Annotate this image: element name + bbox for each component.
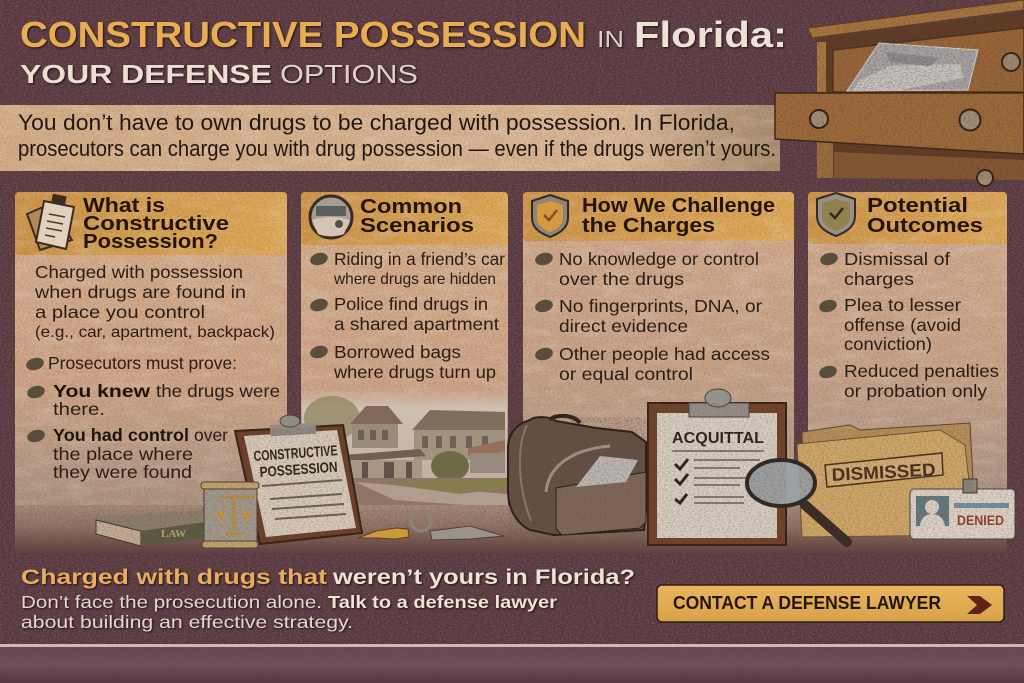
- clipboard: constructive possession: [235, 415, 362, 544]
- scenario list: a shared apartment: [334, 314, 499, 334]
- dismissed stamp: [825, 453, 943, 487]
- id badge: denied: DENIED: [957, 512, 1004, 528]
- challenge list: over the drugs: [559, 269, 684, 289]
- proof list: the drugs were: [156, 381, 280, 401]
- heading: What is: [83, 195, 165, 217]
- call to action heading: [21, 566, 635, 589]
- subtitle: [20, 59, 418, 89]
- dismissed stamp: DISMISSED: [831, 460, 936, 485]
- button: contact a defense lawyer: [657, 585, 1004, 622]
- title: CONSTRUCTIVE POSSESSION: [20, 14, 586, 55]
- heading: Outcomes: [867, 215, 983, 237]
- proof list: [25, 353, 280, 482]
- button: contact a defense lawyer: CONTACT A DEFENSE LAWYER: [673, 593, 941, 613]
- heading: [582, 195, 775, 237]
- call to action text: Talk to a defense lawyer: [328, 592, 557, 612]
- subtitle: YOUR DEFENSE: [20, 59, 272, 89]
- heading: Constructive: [83, 213, 229, 235]
- id badge: denied: [910, 479, 1015, 539]
- panel: what is constructive possession: [15, 192, 287, 547]
- scales of justice tin: [201, 482, 259, 548]
- panel: common scenarios: [301, 192, 508, 547]
- heading: the Charges: [582, 215, 715, 237]
- outcomes list: Reduced penalties: [844, 361, 999, 381]
- icon: shield with check: [817, 193, 855, 236]
- dresser illustration: [775, 0, 1024, 186]
- call to action text: [21, 592, 557, 632]
- plastic bag of drugs: [847, 43, 978, 91]
- proof list: You knew: [53, 381, 150, 401]
- clipboard: acquittal: [648, 389, 786, 545]
- heading: [83, 195, 229, 253]
- footer strip: [0, 644, 1024, 683]
- illustration: neighbourhood houses: [302, 388, 507, 508]
- proof list: they were found: [53, 462, 192, 482]
- outcomes list: conviction): [844, 334, 932, 354]
- arrow: [967, 596, 992, 614]
- call to action text: Don’t face the prosecution alone.: [21, 592, 322, 612]
- scenario list: where drugs turn up: [333, 362, 496, 382]
- title: Florida:: [634, 14, 787, 55]
- definition text: Charged with possession: [35, 262, 243, 282]
- challenge list: Other people had access: [559, 344, 770, 364]
- heading: Common: [360, 196, 462, 218]
- call to action text: about building an effective strategy.: [21, 612, 353, 632]
- outcomes list: charges: [844, 269, 914, 289]
- definition text: a place you control: [35, 302, 205, 322]
- clipboard: constructive possession: POSSESSION: [259, 460, 338, 481]
- panel: potential outcomes: [808, 192, 1007, 547]
- heading: [360, 196, 474, 237]
- drawer knob left: [810, 110, 828, 128]
- heading: [867, 195, 983, 237]
- outcomes list: or probation only: [844, 381, 987, 401]
- heading: How We Challenge: [582, 195, 775, 217]
- heading: Scenarios: [360, 215, 474, 237]
- definition text: when drugs are found in: [34, 282, 246, 302]
- challenge list: No knowledge or control: [559, 249, 759, 269]
- icon: round scenario badge: [310, 196, 352, 238]
- scenario list: Riding in a friend’s car: [334, 249, 505, 269]
- clipboard: constructive possession: CONSTRUCTIVE: [253, 443, 338, 465]
- proof list: the place where: [53, 444, 193, 464]
- challenge list: or equal control: [559, 364, 693, 384]
- definition text: (e.g., car, apartment, backpack): [35, 324, 275, 341]
- challenge list: No fingerprints, DNA, or: [559, 296, 762, 316]
- call to action heading: Charged with drugs that: [21, 566, 327, 589]
- subtitle: OPTIONS: [280, 59, 418, 89]
- backpack: [508, 416, 646, 535]
- outcomes list: Plea to lesser: [844, 295, 961, 315]
- panel: how we challenge the charges: [523, 192, 794, 547]
- book: law: [95, 510, 205, 546]
- scenario list: [309, 249, 505, 382]
- drawer knob right: [960, 110, 980, 130]
- icon: shield with check: [532, 195, 568, 237]
- outcomes list: offense (avoid: [844, 315, 961, 335]
- folder: dismissed: [797, 423, 975, 537]
- heading: Potential: [867, 195, 968, 217]
- definition text: [34, 262, 275, 341]
- open drawer: [775, 93, 1024, 154]
- book: law: LAW: [161, 528, 186, 540]
- magnifying glass: [747, 460, 847, 542]
- challenge list: [534, 249, 770, 384]
- scenario list: Police find drugs in: [334, 294, 488, 314]
- outcomes list: Dismissal of: [844, 249, 950, 269]
- proof list: over: [194, 425, 228, 445]
- keys: [358, 511, 504, 540]
- proof list: Prosecutors must prove:: [48, 353, 237, 373]
- icon: documents: [27, 194, 74, 250]
- proof list: You had control: [53, 425, 189, 445]
- challenge list: direct evidence: [559, 316, 688, 336]
- scenario list: Borrowed bags: [334, 342, 461, 362]
- title: [20, 14, 787, 55]
- title: IN: [597, 26, 624, 52]
- outcomes list: [818, 249, 999, 401]
- shelf: [15, 505, 1007, 554]
- intro banner: [0, 105, 780, 171]
- heading: Possession?: [83, 231, 218, 253]
- intro banner: You don’t have to own drugs to be charged with possession. In Florida,: [18, 110, 735, 135]
- proof list: there.: [53, 399, 105, 419]
- scenario list: where drugs are hidden: [333, 271, 496, 288]
- clipboard: acquittal: ACQUITTAL: [672, 430, 764, 447]
- intro banner: prosecutors can charge you with drug possession — even if the drugs weren’t yours.: [18, 136, 776, 161]
- call to action heading: weren’t yours in Florida?: [332, 566, 635, 589]
